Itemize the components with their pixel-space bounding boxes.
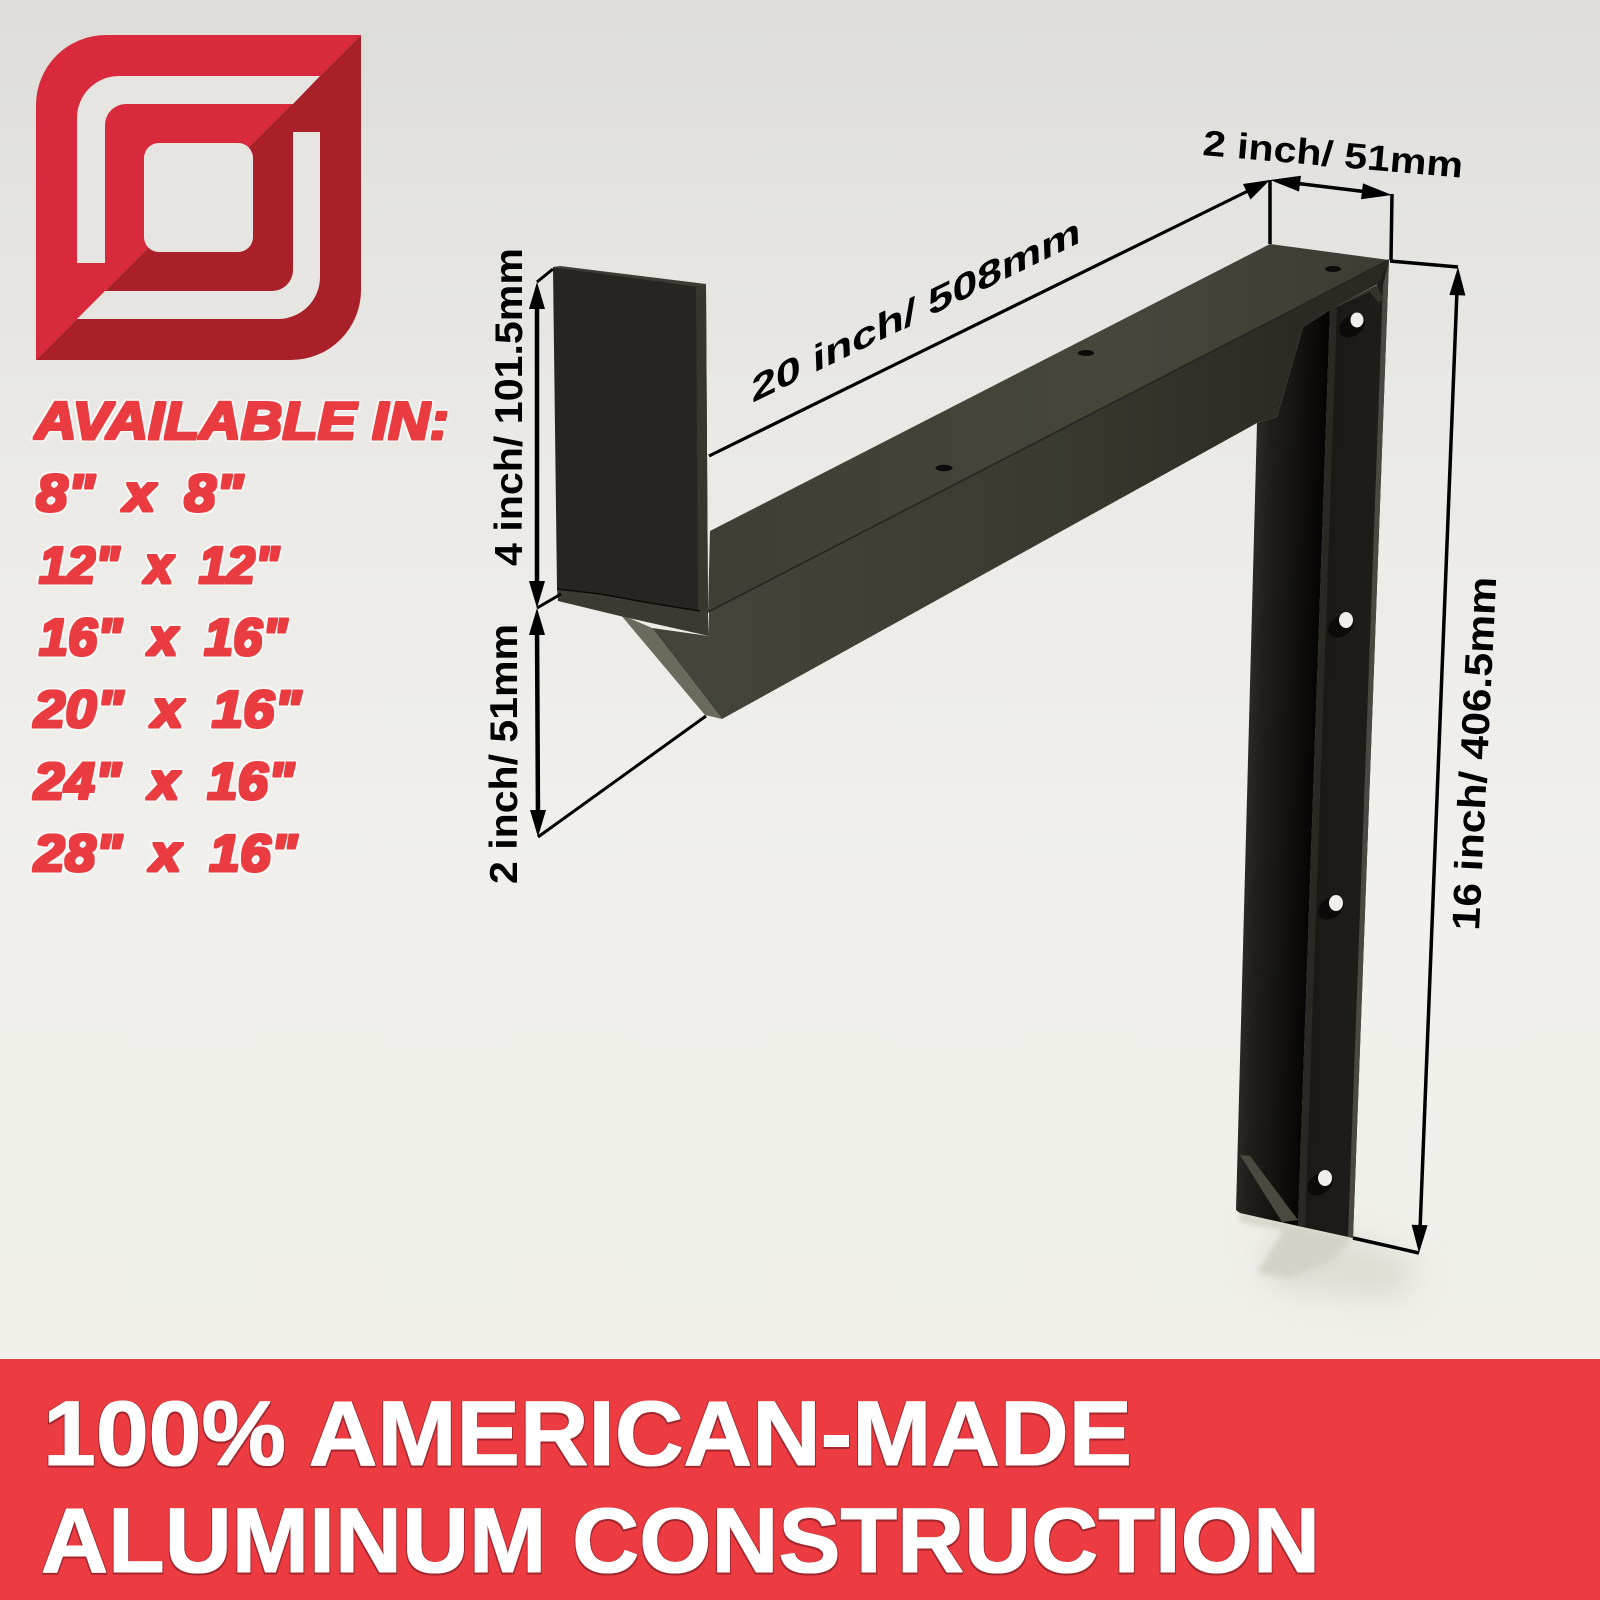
flange front edge bbox=[708, 260, 1389, 612]
front plate bbox=[553, 267, 708, 612]
dimension lines bbox=[529, 176, 1465, 1253]
size 28 x 16: 28" x 16" bbox=[33, 825, 298, 883]
plate top edge bbox=[553, 266, 706, 287]
banner line 2: ALUMINUM CONSTRUCTION bbox=[41, 1490, 1320, 1592]
size 8 x 8: 8" x 8" bbox=[36, 465, 244, 523]
size 24 x 16: 24" x 16" bbox=[33, 753, 295, 811]
arrow: 16 inch height bbox=[1353, 261, 1465, 1253]
left bevel bbox=[620, 614, 722, 719]
bracket illustration bbox=[553, 244, 1389, 1238]
logo bbox=[36, 35, 361, 360]
arrow: 2 inch width bbox=[1270, 176, 1392, 260]
size 20 x 16: 20" x 16" bbox=[33, 681, 302, 739]
heading: available in: AVAILABLE IN: bbox=[33, 392, 449, 451]
vertical arm right face bbox=[1298, 260, 1389, 1238]
upper corner chamfer bbox=[1330, 285, 1384, 310]
plate bottom seam bbox=[557, 589, 700, 611]
size 12 x 12: 12" x 12" bbox=[39, 537, 280, 595]
label: 2 inch / 51mm depth: 2 inch/ 51mm bbox=[483, 624, 526, 884]
banner line 1: 100% AMERICAN-MADE bbox=[43, 1383, 1132, 1485]
top flange bbox=[708, 244, 1389, 612]
arm inner groove highlight bbox=[1298, 308, 1337, 1227]
arrow: 4 inch height bbox=[529, 269, 561, 608]
plate right edge bbox=[696, 286, 708, 612]
bottom banner bbox=[0, 1359, 1600, 1600]
size 16 x 16: 16" x 16" bbox=[39, 609, 288, 667]
label: 16 inch / 406.5mm: 16 inch/ 406.5mm bbox=[1445, 576, 1505, 931]
arm holes bbox=[1303, 310, 1369, 1200]
web face bbox=[652, 260, 1389, 719]
lower bevel bbox=[1240, 1155, 1298, 1222]
right edge highlight bbox=[1348, 260, 1389, 1238]
label: 4 inch / 101.5mm: 4 inch/ 101.5mm bbox=[488, 248, 531, 566]
label: 20 inch / 508mm: 20 inch/ 508mm bbox=[751, 209, 1081, 411]
label: 2 inch / 51mm width: 2 inch/ 51mm bbox=[1201, 122, 1465, 186]
sizes list bbox=[33, 392, 449, 883]
plate underside strip bbox=[557, 589, 709, 636]
dimension labels bbox=[483, 122, 1505, 931]
flange holes bbox=[936, 266, 1341, 471]
arrow: 20 inch length bbox=[709, 180, 1270, 456]
arrow: 2 inch depth bbox=[529, 608, 706, 837]
vertical arm left channel bbox=[1236, 310, 1330, 1226]
floor shadow bbox=[1238, 1212, 1420, 1300]
